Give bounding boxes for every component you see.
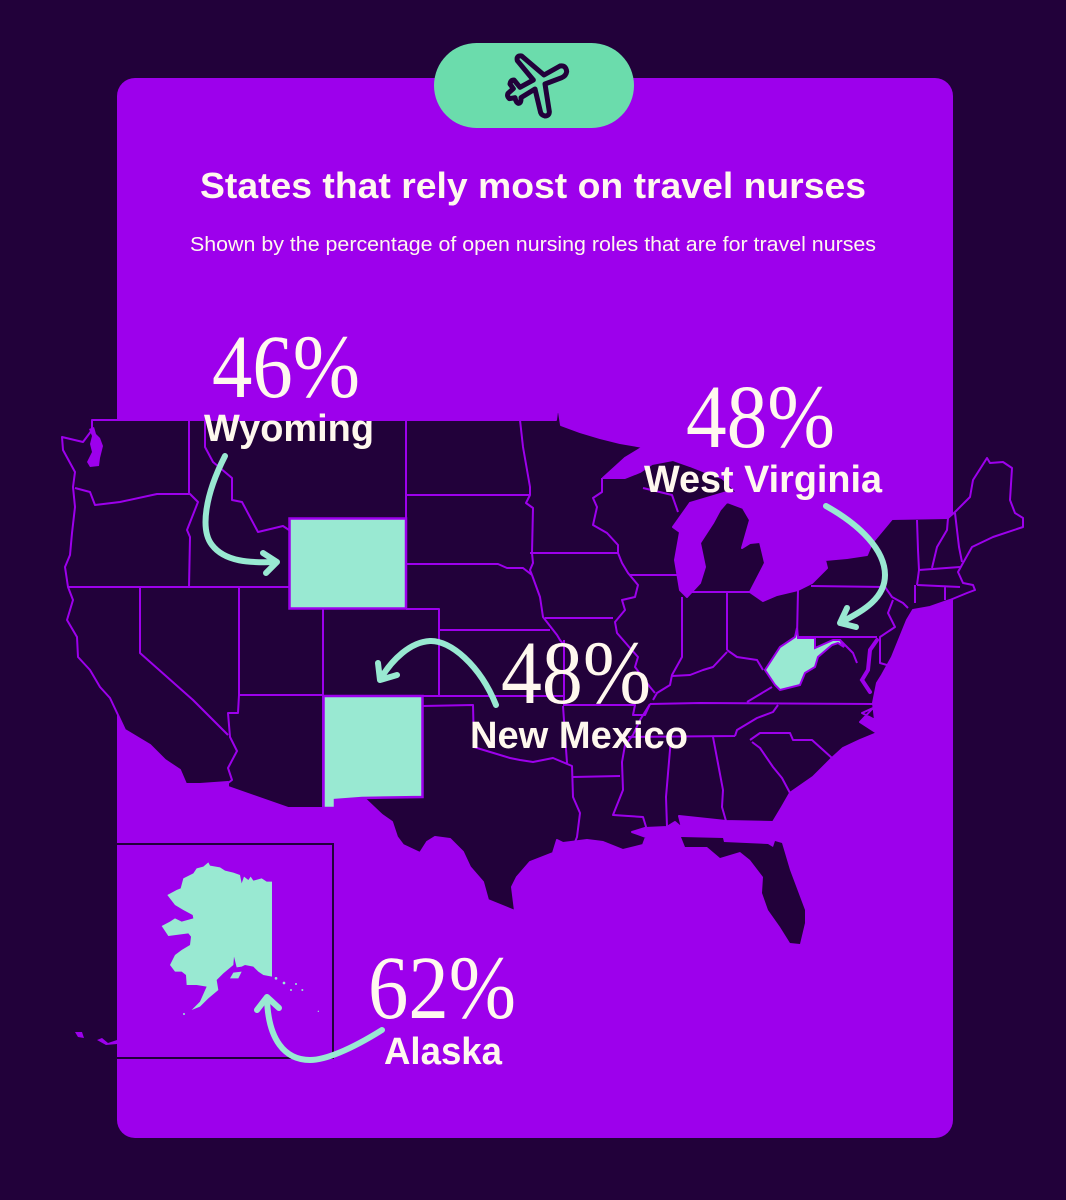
stat: New Mexico: New Mexico xyxy=(470,715,688,757)
stat: Wyoming: 46% xyxy=(212,318,360,417)
stat: Alaska xyxy=(368,939,516,1073)
stat: Alaska: 62% xyxy=(368,939,516,1038)
icon badge: airplane xyxy=(434,43,634,128)
map: contiguous United States xyxy=(62,412,1023,944)
puget sound xyxy=(87,427,103,467)
subtitle: Shown by the percentage of open nursing roles that are for travel nurses xyxy=(190,234,876,256)
panel: main card xyxy=(117,78,953,1138)
stat: West Virginia: West Virginia xyxy=(644,459,883,501)
aleutian islands xyxy=(75,1032,117,1045)
title: States that rely most on travel nurses xyxy=(200,165,866,206)
arrow: New Mexico xyxy=(378,641,496,705)
stat: West Virginia xyxy=(644,368,883,501)
stat: New Mexico: 48% xyxy=(501,624,651,723)
stat: Alaska: Alaska xyxy=(384,1031,503,1073)
state highlight: West Virginia xyxy=(765,628,844,690)
arrow: Alaska xyxy=(257,997,382,1060)
chesapeake bay xyxy=(862,640,877,692)
stat: West Virginia: 48% xyxy=(686,368,835,467)
alaska inset frame xyxy=(117,844,333,1058)
long island sound xyxy=(913,612,930,615)
state borders xyxy=(68,420,962,842)
stat: Wyoming: Wyoming xyxy=(204,408,374,450)
state highlight: New Mexico xyxy=(324,696,422,808)
arrow: Wyoming xyxy=(206,456,277,573)
state highlight: Alaska xyxy=(162,862,319,1015)
stat: New Mexico xyxy=(470,624,688,757)
mainland landmass xyxy=(62,412,1023,911)
arrow: West Virginia xyxy=(826,506,885,627)
state highlight: Wyoming xyxy=(290,518,406,608)
florida xyxy=(681,837,805,944)
